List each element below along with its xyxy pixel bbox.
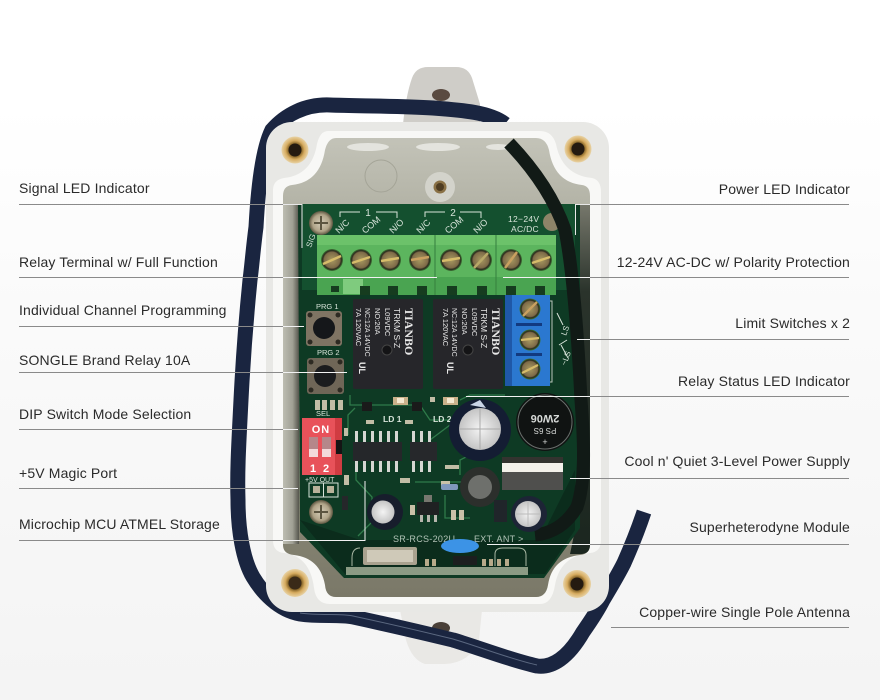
copper traces [348,395,505,536]
callout: Relay Status LED Indicator: Relay Status LED Indicator [678,373,850,389]
status LEDs: LD 1 [383,414,402,424]
callout: +5V Magic Port: +5V Magic Port [19,465,117,481]
cavity wall highlights [347,143,510,151]
relay 2: 7A 120VAC [441,308,450,347]
relay 2: NO:20A [460,308,469,335]
small capacitor right [494,496,547,532]
voltage regulator heat sink [502,457,563,490]
program buttons [306,302,344,394]
terminal labels: N/C [414,217,433,235]
model label: SR-RCS-202U [393,534,455,544]
SEL label and DIP switch: 2 [323,463,329,475]
SEL label and DIP switch: 1 [310,463,316,475]
superheterodyne module [346,539,528,575]
knockout circle [365,160,397,192]
relay 1: L09VDC [383,308,392,337]
relay 1 [353,299,423,389]
mounting tab: top [403,67,480,124]
black supercap [516,393,574,451]
PCB mounting screws [309,211,561,524]
relay 1: 7A 120VAC [354,308,363,347]
enclosure body [266,122,609,612]
black supercap: 2W06 [531,412,559,424]
limit switch markings: ~LS [559,350,573,367]
callout: Microchip MCU ATMEL Storage [19,481,365,540]
terminal screws [321,249,552,271]
callout: DIP Switch Mode Selection: DIP Switch Mode Selection [19,406,191,422]
callout: Individual Channel Programming: Individual Channel Programming [19,302,227,318]
relay 2: UL [445,362,455,374]
relay 1: TRKM S-Z [392,308,402,348]
+5V port [305,477,338,497]
relay 2: TIANBO [489,308,503,355]
terminal labels: 2 [450,208,456,219]
callout: Copper-wire Single Pole Antenna: Copper-wire Single Pole Antenna [639,604,850,620]
enclosure photo [238,67,644,666]
terminal labels: 1 [365,208,371,219]
relay 1: NO:20A [373,308,382,335]
standoff boss [425,172,455,202]
status LEDs: LD 2 [433,414,452,424]
board base [298,204,580,578]
terminal labels: AC/DC [511,224,539,234]
callout: Signal LED Indicator: Signal LED Indicator [19,180,150,196]
relay 2: TRKM S-Z [479,308,489,348]
SEL label and DIP switch: SEL [316,409,330,418]
large capacitor [449,399,511,461]
cavity [283,138,590,597]
regulator transistor [410,481,464,522]
terminal labels: N/O [471,217,490,235]
PRG 1: PRG 1 [316,302,339,311]
relay 1: TIANBO [402,308,416,355]
blue limit-switch terminal [505,295,552,386]
terminal labels: COM [443,214,465,236]
callouts right [466,181,850,628]
callouts left [19,180,437,540]
outer antenna wire [238,105,644,666]
callout: 12-24V AC-DC w/ Polarity Protection: 12-24V AC-DC w/ Polarity Protection [617,254,850,270]
small capacitor left [367,494,403,530]
EXT ANT label: EXT. ANT > [474,534,524,544]
callout: Limit Switches x 2: Limit Switches x 2 [735,315,850,331]
circuit board [298,143,584,578]
gasket rim [273,131,601,604]
callout: Microchip MCU ATMEL Storage: Microchip MCU ATMEL Storage [19,516,220,532]
small SMD parts [315,397,459,510]
callout: Superheterodyne Module: Superheterodyne Module [689,519,850,535]
relay 2: NC:12A 14VDC [450,308,457,357]
microcontroller chips [353,431,437,472]
green terminal strip [317,235,556,295]
callout: Signal LED Indicator [19,180,302,248]
limit switch markings [557,313,573,367]
inductor [460,467,500,507]
limit switch markings: LS [559,324,571,337]
inner antenna wire [509,143,584,535]
relay 1: NC:12A 14VDC [363,308,370,357]
callout: Power LED Indicator [576,181,850,235]
relay 1: UL [357,362,367,374]
terminal labels: N/C [333,217,352,235]
relay 2: L09VDC [470,308,479,337]
terminal labels [304,208,539,249]
callout: Relay Terminal w/ Full Function: Relay Terminal w/ Full Function [19,254,218,270]
terminal labels: 12−24V [508,214,539,224]
terminal labels: SIG [304,233,318,249]
+5V port: +5V OUT [305,477,335,484]
callout: SONGLE Brand Relay 10A: SONGLE Brand Relay 10A [19,352,191,368]
SEL label and DIP switch: ON [312,424,330,436]
right cavity wall shading [570,204,590,554]
terminal labels: N/O [387,217,406,235]
SEL label and DIP switch [302,409,342,475]
callout: Power LED Indicator: Power LED Indicator [719,181,850,197]
PRG 2: PRG 2 [317,348,340,357]
callout: Cool n' Quiet 3-Level Power Supply: Cool n' Quiet 3-Level Power Supply [624,453,850,469]
left cavity wall shading [283,204,299,544]
black supercap: PS 6S [534,426,556,435]
relay 2 [433,299,503,389]
black supercap: + [542,437,548,447]
mounting tab: bottom [400,610,482,664]
terminal labels: COM [360,214,382,236]
status LEDs [362,397,458,424]
brass inserts [281,136,592,598]
terminal slots [331,286,545,295]
